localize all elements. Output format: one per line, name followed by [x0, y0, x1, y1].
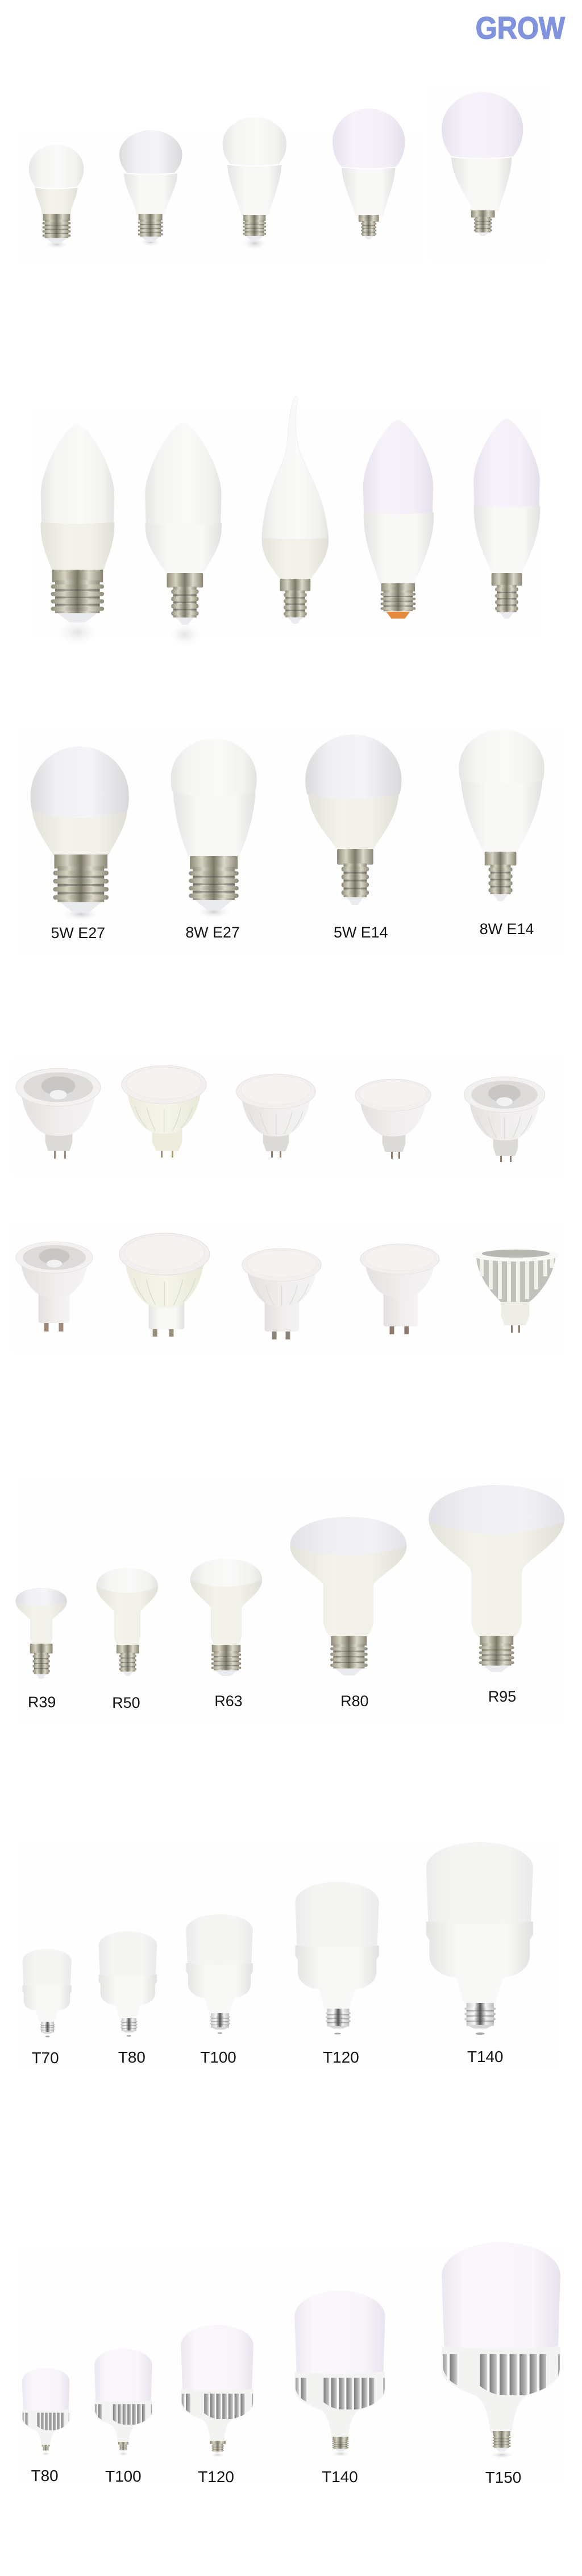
bulb T70	[22, 1949, 72, 2038]
bulb T140 finned	[294, 2291, 385, 2457]
bulb R50	[97, 1568, 158, 1676]
bulb 5W E14	[305, 735, 401, 905]
bulb T120	[295, 1882, 379, 2034]
label: 8W E27: 8W E27	[185, 924, 240, 941]
panel: G45 bulbs	[31, 729, 544, 941]
bulb 8W E14	[459, 729, 544, 901]
candle bulb 5	[473, 418, 540, 619]
GU10 frosted lamp 3	[242, 1248, 321, 1339]
bulb R95	[429, 1485, 564, 1672]
bulb T120 finned	[181, 2325, 253, 2458]
panel: MR16 spot lamps	[16, 1065, 545, 1162]
GU10 COB lamp 1	[16, 1242, 93, 1331]
bulb 1	[29, 144, 84, 249]
candle bulb 4	[363, 420, 434, 619]
MR16 COB lamp 1	[16, 1068, 101, 1159]
label: 5W E27: 5W E27	[51, 924, 105, 941]
label: R39: R39	[28, 1694, 56, 1711]
label: T150: T150	[485, 2469, 521, 2486]
MR16 frosted lamp 2	[122, 1065, 206, 1158]
label: T120: T120	[198, 2468, 234, 2486]
label: R80: R80	[340, 1693, 368, 1710]
panel: A-shape bulbs	[29, 92, 523, 250]
panel: T-shape finned bulbs	[22, 2242, 560, 2486]
bulb R63	[190, 1559, 262, 1676]
bulb R80	[290, 1517, 406, 1675]
label: 5W E14: 5W E14	[334, 924, 388, 941]
label: 8W E14: 8W E14	[480, 920, 534, 938]
GU10 frosted lamp 2	[119, 1233, 210, 1337]
bulb T80 finned	[22, 2368, 69, 2456]
label: T70: T70	[32, 2049, 59, 2067]
bulb 5W E27	[31, 746, 129, 921]
MR16 COB lamp 5	[464, 1077, 545, 1162]
bulb 3	[223, 117, 286, 250]
MR16 frosted lamp 3	[236, 1074, 315, 1158]
candle bulb 1	[40, 424, 114, 647]
bulb 5	[442, 92, 523, 236]
panel: R-type reflector bulbs	[15, 1485, 564, 1711]
bulb R39	[15, 1588, 67, 1679]
label: T80: T80	[118, 2048, 146, 2066]
label: R95: R95	[488, 1688, 516, 1705]
bulb 4	[332, 109, 405, 239]
flame candle bulb	[262, 396, 329, 624]
bulb 2	[119, 130, 182, 247]
label: T120: T120	[323, 2048, 359, 2066]
panel: T-shape plastic bulbs	[22, 1842, 533, 2067]
bulb T140	[426, 1842, 533, 2035]
bulb T100	[186, 1914, 253, 2034]
GU10 frosted lamp 4	[360, 1244, 439, 1334]
MR16 frosted lamp 4	[355, 1079, 431, 1159]
label: T140: T140	[322, 2468, 358, 2486]
logo: GROW: GROW	[476, 10, 565, 45]
candle bulb 2	[145, 422, 222, 648]
label: T140: T140	[467, 2048, 503, 2065]
bulb T100 finned	[94, 2349, 152, 2457]
label: R63: R63	[214, 1693, 243, 1710]
label: T80: T80	[31, 2467, 59, 2484]
bulb T150 finned	[442, 2242, 560, 2459]
label: R50: R50	[112, 1694, 140, 1711]
panel: candle bulbs	[40, 396, 540, 648]
label: T100: T100	[105, 2467, 142, 2485]
bulb T80	[99, 1931, 157, 2036]
panel: GU10 spot lamps	[16, 1233, 559, 1339]
bulb 8W E27	[171, 739, 257, 919]
MR16 finned lamp 5	[472, 1249, 559, 1333]
label: T100: T100	[200, 2048, 236, 2066]
